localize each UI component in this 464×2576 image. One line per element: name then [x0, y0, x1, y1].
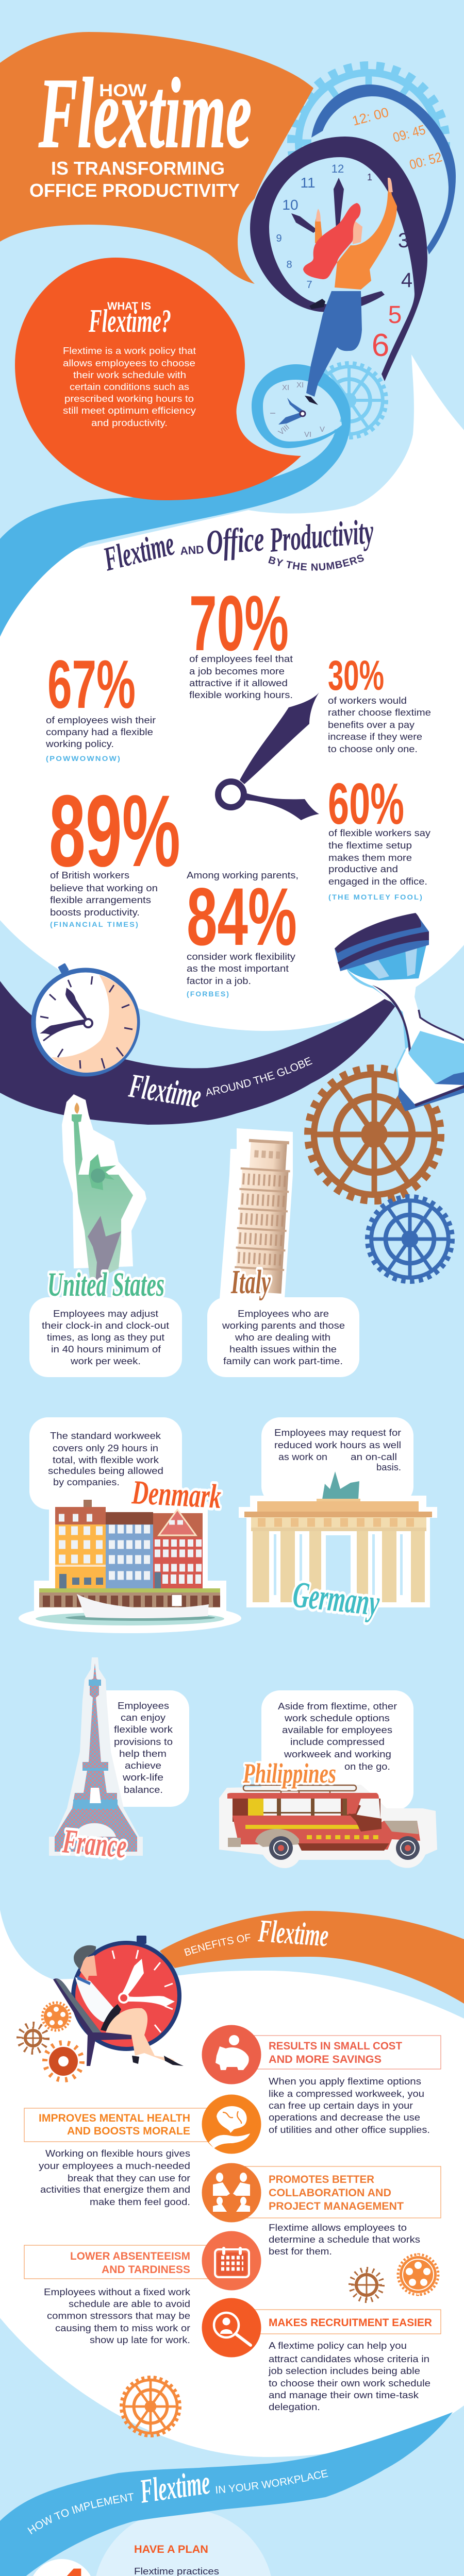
icon: large light gear	[292, 66, 445, 219]
stat: 30 percent	[328, 652, 431, 754]
description: your employees a much-needed	[39, 2160, 190, 2171]
heading: around the globe	[126, 1057, 312, 1115]
heading: implement: HOW TO IMPLEMENT	[27, 2493, 134, 2534]
small spiral clock	[0, 364, 386, 637]
icon: statue of liberty	[62, 1094, 146, 1283]
heading: what is flextime	[88, 300, 171, 339]
panel: france	[49, 1657, 189, 1866]
panel: philippines	[219, 1690, 437, 1868]
pale bubble	[93, 2509, 274, 2576]
heading: what is flextime: Flextime?	[88, 302, 171, 339]
card: philippines	[261, 1690, 413, 1810]
stat: 67 percent: company had a flexible	[46, 726, 153, 737]
heading: HAVE A PLAN	[134, 2544, 208, 2555]
definition text: still meet optimum efficiency	[63, 405, 196, 416]
stat: 70 percent	[189, 580, 293, 700]
card: france	[82, 1690, 189, 1807]
description: Flextime allows employees to	[269, 2222, 407, 2233]
stat: 84 percent: consider work flexibility	[187, 951, 296, 962]
description: causing them to miss work or	[55, 2323, 190, 2333]
heading: MAKES RECRUITMENT EASIER	[269, 2317, 432, 2329]
roman numerals: I	[268, 412, 277, 414]
definition text: Flextime is a work policy that	[63, 345, 196, 356]
card: denmark: schedules being allowed	[48, 1465, 163, 1476]
heading: implement: Flextime	[137, 2464, 212, 2511]
roman numerals: V	[320, 425, 325, 434]
stat: 84 percent: (FORBES)	[187, 990, 230, 998]
card: denmark: covers only 29 hours in	[53, 1443, 158, 1453]
card: germany	[261, 1417, 413, 1505]
description: delegation.	[269, 2401, 320, 2412]
roman numerals	[268, 381, 325, 439]
card: germany: Employees may request for	[274, 1427, 401, 1438]
icon: brown gear small	[351, 2269, 382, 2300]
icon: magnifier with person	[202, 2298, 261, 2358]
dark clock ring	[250, 137, 427, 381]
definition text: prescribed working hours to	[64, 393, 194, 404]
spiral clock hands	[278, 398, 304, 425]
heading	[269, 2040, 402, 2065]
benefit: collaboration	[202, 2163, 441, 2257]
description: can free up certain days in your	[269, 2100, 413, 2111]
clock numerals: 7	[306, 279, 312, 291]
stat: 89 percent: believe that working on	[50, 883, 158, 893]
card: germany: an on-call	[351, 1451, 397, 1462]
stat: 60 percent	[328, 771, 431, 901]
icon: hourglass	[335, 913, 464, 1111]
heading: implement: IN YOUR WORKPLACE	[216, 2469, 328, 2494]
clock times: 12: 00	[351, 104, 390, 129]
description: Employees without a fixed work	[44, 2286, 191, 2297]
description: show up late for work.	[90, 2334, 190, 2345]
card: germany: reduced work hours as well	[274, 1439, 401, 1450]
heading	[39, 2112, 190, 2137]
roman numerals: XI	[296, 381, 304, 389]
card: germany: as work on	[278, 1451, 327, 1462]
heading: COLLABORATION AND	[269, 2187, 391, 2199]
label: italy: Italy	[230, 1263, 271, 1301]
illustration: jeepney	[219, 1785, 437, 1868]
card: united states: work per week.	[70, 1355, 141, 1366]
roman numerals: VI	[304, 430, 311, 439]
blue clock arc	[311, 84, 456, 255]
stat: 70 percent: a job becomes more	[189, 666, 285, 676]
stat: 60 percent: (THE MOTLEY FOOL)	[328, 893, 423, 901]
card: denmark: by companies.	[53, 1477, 120, 1487]
stat: 30 percent: of workers would	[328, 695, 407, 706]
heading: AND MORE SAVINGS	[269, 2054, 382, 2065]
clock times	[351, 104, 443, 173]
clock numerals: 9	[276, 233, 282, 244]
description: to choose their own work schedule	[269, 2378, 430, 2388]
heading	[70, 2250, 190, 2276]
stat: 60 percent: of flexible workers say	[328, 827, 431, 838]
label: denmark: Denmark	[131, 1473, 222, 1516]
description: A flextime policy can help you	[269, 2340, 407, 2351]
description: common stressors that may be	[47, 2310, 190, 2321]
stat: 70 percent: of employees feel that	[189, 653, 293, 664]
benefit: mental health and morale	[24, 2095, 261, 2207]
illustration: copenhagen houses and boat	[19, 1500, 241, 1633]
definition text: and productivity.	[91, 417, 168, 428]
card: france: help them	[119, 1748, 167, 1759]
card: denmark: The standard workweek	[50, 1430, 161, 1441]
stat: 60 percent: engaged in the office.	[328, 876, 427, 887]
description: like a compressed workweek, you	[269, 2088, 424, 2099]
philippines text: Aside from flextime, other	[278, 1701, 397, 1711]
section title: flextime and office productivity: Flextime	[100, 524, 178, 579]
hero illustration: gears and clocks	[292, 66, 456, 255]
description: and manage their own time-task	[269, 2389, 419, 2400]
title: Flextime	[38, 58, 252, 169]
illustration: eiffel tower	[49, 1657, 143, 1856]
heading: PROMOTES BETTER	[269, 2174, 374, 2185]
stat: 60 percent: makes them more	[328, 852, 412, 863]
clock numerals: 4	[401, 269, 412, 292]
card: united states: their clock-in and clock-out	[42, 1320, 169, 1331]
card: italy: working parents and those	[222, 1320, 345, 1331]
card: italy: health issues within the	[229, 1344, 337, 1354]
box	[24, 2245, 231, 2279]
clock times: 00: 52	[408, 149, 443, 173]
stat: 67 percent: (POWWOWNOW)	[46, 754, 121, 762]
description: attract candidates whose criteria in	[269, 2353, 429, 2364]
definition text: their work schedule with	[73, 369, 186, 380]
card: denmark: total, with flexible work	[53, 1454, 159, 1465]
card: france: flexible work	[114, 1724, 173, 1735]
clock numerals: 1	[367, 172, 372, 182]
icon: orange rosette gear	[398, 2255, 438, 2295]
clock hands	[291, 178, 344, 233]
clock numerals	[276, 162, 412, 363]
stat: 30 percent: increase if they were	[328, 731, 422, 742]
stat: 89 percent: boosts productivity.	[50, 907, 140, 918]
dark clock face	[250, 137, 427, 381]
card: france: balance.	[124, 1784, 163, 1795]
philippines text	[278, 1701, 397, 1772]
stat: 67 percent: working policy.	[45, 738, 114, 749]
stat: 89 percent: 89%	[49, 774, 180, 888]
card: italy: Employees who are	[238, 1308, 329, 1319]
illustration: brandenburg gate	[239, 1471, 437, 1607]
card: united states	[29, 1297, 182, 1377]
stat: 84 percent: as the most important	[187, 963, 289, 974]
clock numerals: 5	[388, 301, 402, 329]
box	[24, 2108, 231, 2142]
section title: flextime and office productivity: Office	[205, 519, 266, 562]
panel: italy	[207, 1128, 359, 1377]
label: germany: Germany	[291, 1573, 382, 1624]
icon: brain in hand	[202, 2095, 261, 2154]
roman numerals: XI	[282, 383, 289, 392]
woman figure	[303, 178, 397, 405]
stat: 67 percent	[45, 647, 156, 762]
stat: 67 percent: of employees wish their	[46, 715, 156, 725]
roman numerals: VIII	[277, 423, 291, 437]
box	[231, 2036, 441, 2069]
stat: 30 percent: rather choose flextime	[328, 707, 431, 718]
description	[44, 2286, 191, 2345]
card: france: achieve	[125, 1760, 161, 1771]
card: france: Employees	[118, 1700, 169, 1711]
card: united states: Employees may adjust	[53, 1308, 158, 1319]
card: france: work-life	[122, 1772, 163, 1783]
card: united states: in 40 hours minimum of	[51, 1344, 161, 1354]
chair	[53, 1978, 131, 2066]
card: france: can enjoy	[121, 1712, 166, 1723]
stat: 84 percent: factor in a job.	[187, 975, 251, 986]
heading: around the globe: Flextime	[126, 1067, 204, 1115]
icon: orange gear	[122, 2378, 179, 2435]
box	[231, 2310, 441, 2334]
torso and arms	[315, 178, 397, 290]
legs	[306, 291, 362, 397]
section title: flextime and office productivity	[100, 512, 375, 579]
card: denmark	[29, 1417, 182, 1510]
panel: germany	[239, 1417, 437, 1624]
heading: RESULTS IN SMALL COST	[269, 2040, 402, 2052]
hair	[303, 203, 361, 279]
label: france: France	[61, 1822, 128, 1866]
philippines text: work schedule options	[284, 1713, 390, 1723]
clock numerals: 10	[282, 197, 299, 213]
description: best for them.	[269, 2246, 332, 2257]
heading: IMPROVES MENTAL HEALTH	[39, 2112, 190, 2124]
stat: 70 percent: 70%	[189, 580, 289, 667]
stat: 70 percent: flexible working hours.	[189, 689, 293, 700]
heading: AND BOOSTS MORALE	[67, 2125, 190, 2137]
icon: large clock hands	[218, 692, 319, 820]
stat: 84 percent	[187, 870, 299, 998]
definition text	[63, 345, 196, 428]
description	[268, 2340, 430, 2412]
description	[269, 2222, 420, 2257]
panel: denmark	[19, 1417, 241, 1633]
benefit: recruitment	[202, 2298, 441, 2412]
card: italy	[207, 1297, 359, 1377]
heading: LOWER ABSENTEEISM	[70, 2250, 190, 2262]
title	[29, 58, 252, 201]
blue ribbon	[0, 417, 351, 637]
stat: 84 percent: Among working parents,	[187, 870, 299, 880]
icon: stopwatch	[34, 963, 138, 1074]
stat: 60 percent: productive and	[328, 863, 398, 874]
icon: leaning tower	[220, 1128, 293, 1298]
philippines text: on the go.	[344, 1761, 390, 1772]
description: make them feel good.	[90, 2196, 190, 2207]
benefit: small cost and savings	[202, 2025, 441, 2135]
icon: blue gear	[368, 1197, 452, 1281]
blue clock face	[309, 84, 456, 255]
description	[269, 2076, 430, 2135]
clock numerals: 6	[372, 328, 389, 363]
benefit: lower absenteeism	[24, 2231, 261, 2345]
stat: 67 percent: 67%	[47, 647, 136, 723]
blue ribbon: how to implement	[0, 2412, 453, 2576]
heading: benefits	[184, 1913, 329, 1956]
panel: numbers white backdrop	[0, 354, 464, 1031]
heading: benefits: BENEFITS OF	[184, 1934, 251, 1956]
description: Working on flexible hours gives	[45, 2148, 190, 2159]
stat: 30 percent: 30%	[328, 652, 384, 699]
label: philippines: Philippines	[242, 1758, 336, 1789]
description: determine a schedule that works	[269, 2234, 420, 2245]
stat: 89 percent	[49, 774, 180, 928]
step 1 panel	[29, 2509, 274, 2576]
heading: AND TARDINESS	[102, 2264, 190, 2276]
stat: 30 percent: to choose only one.	[328, 743, 418, 754]
title: IS TRANSFORMING	[51, 158, 225, 179]
clock numerals: 12	[332, 162, 344, 175]
big dark clock	[250, 137, 427, 381]
heading: PROJECT MANAGEMENT	[269, 2200, 404, 2212]
icon: calendar	[202, 2231, 261, 2291]
clock numerals: 11	[300, 175, 316, 191]
orange ribbon: benefits of flextime	[160, 1911, 464, 2004]
icon: timer	[73, 1936, 179, 2049]
description: schedule are able to avoid	[69, 2298, 190, 2309]
section title: flextime and office productivity: BY THE NUMBERS	[268, 554, 364, 571]
card: italy: family can work part-time.	[223, 1355, 343, 1366]
illustration: seated man with timer	[53, 1936, 184, 2066]
description: operations and decrease the use	[269, 2112, 420, 2123]
description: When you apply flextime options	[269, 2076, 421, 2087]
definition text: certain conditions such as	[70, 381, 189, 392]
stat: 60 percent: the flextime setup	[328, 840, 412, 851]
box	[231, 2166, 441, 2218]
card: germany: basis.	[376, 1462, 401, 1472]
heading: implement	[27, 2464, 328, 2534]
stat: 30 percent: benefits over a pay	[328, 719, 415, 730]
heading: around the globe: AROUND THE GLOBE	[206, 1057, 312, 1096]
description: of utilities and other office supplies.	[269, 2124, 430, 2135]
panel: united states	[29, 1094, 182, 1377]
panel: benefits white backdrop	[0, 1910, 464, 2457]
card: united states: times, as long as they put	[47, 1332, 164, 1343]
navy ribbon: flextime around the globe	[0, 981, 395, 1125]
description: activities that energize them and	[40, 2184, 190, 2195]
philippines text: available for employees	[282, 1724, 392, 1735]
clock times: 09: 45	[391, 122, 427, 145]
section title: flextime and office productivity: AND	[180, 543, 204, 557]
description: job selection includes being able	[268, 2365, 420, 2376]
icon: team	[202, 2163, 261, 2223]
label: united states: United States	[47, 1266, 164, 1303]
definition text: allows employees to choose	[63, 358, 195, 368]
stat: 89 percent: flexible arrangements	[50, 894, 151, 905]
orange-red bubble: what is flextime	[15, 258, 301, 500]
spiral clock face	[261, 377, 342, 444]
philippines text: include compressed	[290, 1736, 385, 1747]
stat: 89 percent: of British workers	[50, 870, 129, 880]
man body	[75, 1977, 117, 2022]
stat: 89 percent: (FINANCIAL TIMES)	[50, 920, 139, 928]
white circle	[29, 2559, 95, 2576]
icon: brown star gear	[20, 2025, 46, 2052]
icon: small light gear	[312, 364, 386, 437]
heading: benefits: Flextime	[257, 1913, 329, 1953]
icon: small orange gear	[42, 2003, 70, 2030]
spiral clock ring	[252, 364, 351, 448]
stat: 84 percent: 84%	[187, 871, 297, 962]
hero title bubble	[0, 32, 313, 284]
clock numerals: 3	[398, 229, 409, 252]
icon: piggy bank	[202, 2025, 261, 2084]
icon: sun gear	[45, 2043, 82, 2080]
title: OFFICE PRODUCTIVITY	[29, 180, 240, 201]
heading: what is flextime: WHAT IS	[107, 300, 151, 312]
stat: 60 percent: 60%	[328, 771, 404, 836]
clock numerals: 8	[286, 259, 292, 270]
philippines text: workweek and working	[284, 1749, 391, 1759]
heading	[269, 2174, 404, 2212]
card: france: provisions to	[114, 1736, 173, 1747]
description	[39, 2148, 190, 2207]
card: italy: who are dealing with	[235, 1332, 330, 1343]
icon: brown gear	[308, 1069, 440, 1200]
title: HOW	[99, 81, 147, 100]
stat: 70 percent: attractive if it allowed	[189, 677, 288, 688]
section title: flextime and office productivity: Productivity	[268, 512, 375, 560]
description: break that they can use for	[68, 2173, 190, 2183]
